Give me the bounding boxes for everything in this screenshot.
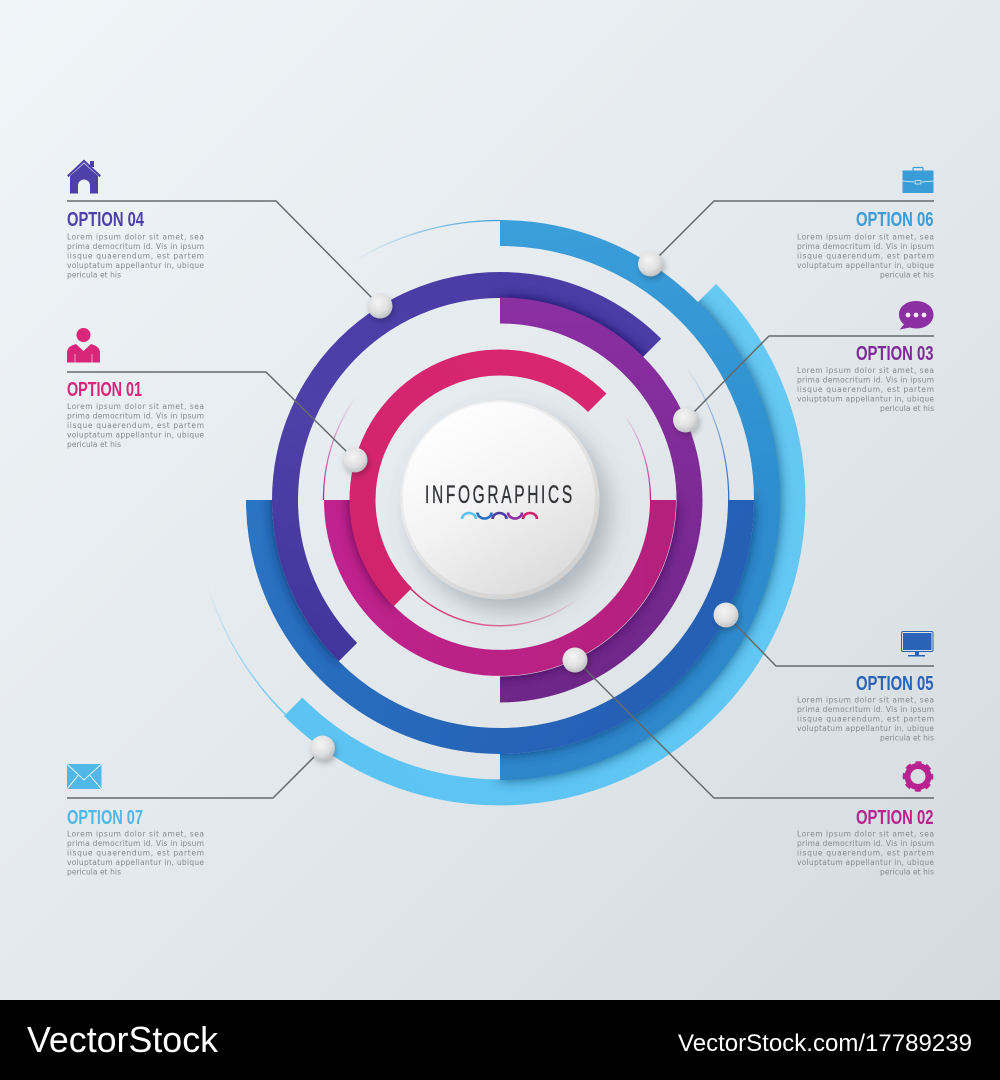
body text: iisque quaerendum, est partem	[67, 848, 204, 858]
body text: voluptatum appellantur in, ubique	[797, 858, 934, 867]
marker: option 03	[673, 408, 698, 432]
thin arc: option 07 tail	[207, 583, 286, 714]
radial chart	[207, 220, 792, 792]
connector: option 01	[67, 372, 347, 452]
body text: Lorem ipsum dolor sit amet, sea	[797, 232, 934, 242]
body text: pericula et his	[67, 440, 121, 449]
body text: voluptatum appellantur in, ubique	[67, 430, 204, 440]
body text: Lorem ipsum dolor sit amet, sea	[797, 366, 934, 375]
body text: prima democritum id. Vis in ipsum	[797, 376, 934, 384]
heading: OPTION 06	[856, 209, 934, 231]
heading: OPTION 03	[856, 343, 934, 365]
body text: Lorem ipsum dolor sit amet, sea	[797, 696, 934, 704]
body text	[67, 232, 204, 280]
body text: pericula et his	[67, 270, 121, 280]
panel: option 04	[67, 160, 204, 280]
footer brand: VectorStock	[27, 1019, 219, 1060]
panel: option 06	[797, 168, 934, 280]
body text: Lorem ipsum dolor sit amet, sea	[67, 830, 204, 838]
thin arc: option 06 tail	[355, 220, 500, 260]
body text: prima democritum id. Vis in ipsum	[67, 242, 204, 251]
body text: voluptatum appellantur in, ubique	[797, 724, 934, 733]
footer bar	[0, 1000, 1000, 1080]
body text: Lorem ipsum dolor sit amet, sea	[67, 232, 204, 242]
heading: OPTION 02	[856, 807, 934, 829]
body text	[797, 366, 934, 413]
body text: voluptatum appellantur in, ubique	[67, 261, 204, 270]
body text: iisque quaerendum, est partem	[67, 252, 204, 260]
footer image id: VectorStock.com/17789239	[678, 1030, 972, 1057]
body text: pericula et his	[880, 270, 934, 280]
center disc	[400, 400, 610, 612]
body text: iisque quaerendum, est partem	[797, 714, 934, 724]
heading: OPTION 07	[67, 807, 143, 829]
body text: Lorem ipsum dolor sit amet, sea	[797, 830, 934, 838]
body text	[67, 830, 204, 876]
squiggle logo	[462, 512, 537, 519]
body text: prima democritum id. Vis in ipsum	[797, 242, 934, 251]
body text	[797, 830, 934, 876]
center title: INFOGRAPHICS	[425, 481, 575, 509]
body text: iisque quaerendum, est partem	[797, 385, 934, 394]
icon: monitor	[902, 632, 933, 656]
body text: prima democritum id. Vis in ipsum	[797, 839, 934, 848]
heading: OPTION 04	[67, 209, 145, 231]
connector: option 03	[692, 336, 934, 414]
icon: envelope	[67, 764, 102, 789]
body text: pericula et his	[880, 868, 934, 876]
body text	[67, 402, 204, 449]
ring: option 03	[500, 310, 690, 690]
body text	[797, 696, 934, 742]
connector: option 04	[67, 201, 372, 298]
ring: option 06	[500, 233, 767, 767]
icon: house	[67, 160, 101, 194]
ring: option 04	[285, 285, 652, 652]
body text: Lorem ipsum dolor sit amet, sea	[67, 402, 204, 411]
icon: gear	[905, 763, 931, 790]
thin arc: option 03 tail	[626, 417, 651, 500]
ring: option 05	[259, 500, 741, 741]
body text: pericula et his	[67, 868, 121, 876]
ring: option 02	[337, 500, 663, 663]
panel: option 02	[797, 763, 934, 876]
body text: pericula et his	[880, 404, 934, 413]
panel: option 07	[67, 764, 204, 876]
marker: option 06	[638, 252, 663, 276]
ring: option 07	[293, 293, 792, 792]
body text: voluptatum appellantur in, ubique	[67, 858, 204, 867]
body text: pericula et his	[880, 734, 934, 742]
connector: option 02	[583, 667, 934, 798]
icon: speech bubble	[899, 301, 934, 330]
heading: OPTION 01	[67, 379, 142, 401]
marker: option 02	[562, 648, 588, 672]
ring: option 01	[362, 362, 597, 597]
marker: option 01	[342, 448, 368, 472]
body text: iisque quaerendum, est partem	[797, 252, 934, 260]
heading: OPTION 05	[856, 673, 934, 695]
body text: voluptatum appellantur in, ubique	[797, 394, 934, 404]
marker: option 04	[368, 294, 392, 318]
panel: option 01	[67, 328, 204, 449]
connector: option 06	[658, 201, 934, 257]
marker: option 07	[310, 736, 335, 760]
body text: voluptatum appellantur in, ubique	[797, 261, 934, 270]
body text: iisque quaerendum, est partem	[67, 421, 204, 430]
body text: prima democritum id. Vis in ipsum	[67, 839, 204, 848]
body text: prima democritum id. Vis in ipsum	[797, 705, 934, 714]
thin arc: option 02 tail	[323, 398, 355, 500]
body text	[797, 232, 934, 280]
icon: person	[67, 328, 100, 362]
connector: option 05	[735, 624, 934, 666]
connector: option 07	[67, 756, 315, 798]
thin arc: option 05 tail	[686, 367, 729, 500]
panel: option 03	[797, 301, 934, 413]
body text: iisque quaerendum, est partem	[797, 848, 934, 858]
thin arc: option 01 tail	[411, 589, 582, 626]
panel: option 05	[797, 632, 934, 742]
icon: briefcase	[902, 168, 934, 193]
body text: prima democritum id. Vis in ipsum	[67, 412, 204, 420]
marker: option 05	[714, 602, 738, 628]
